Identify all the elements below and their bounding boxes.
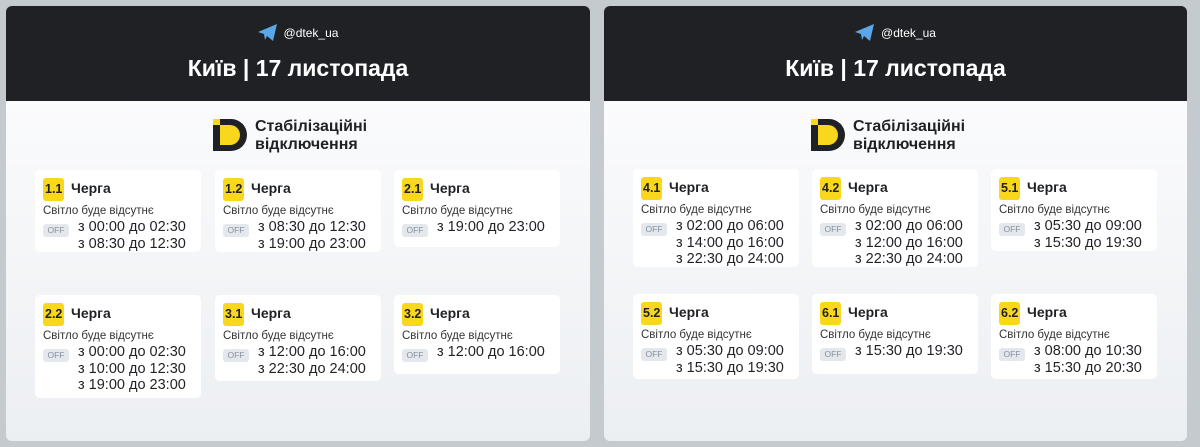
- card 6.2: Черга: [1027, 304, 1067, 320]
- telegram handle: @dtek_ua: [284, 26, 338, 40]
- card 6.1: Черга: [848, 304, 888, 320]
- card 3.1: з 12:00 до 16:00: [258, 344, 366, 360]
- card 2.2: з 00:00 до 02:30: [78, 344, 186, 360]
- telegram handle: @dtek_ua: [881, 26, 936, 40]
- logo: stabilization outages: відключення: [853, 136, 956, 153]
- card 2.1: OFF: [406, 225, 424, 235]
- card 2.2: Світло буде відсутнє: [43, 330, 154, 342]
- card 1.1: 1.1: [45, 182, 62, 196]
- card 6.1: з 15:30 до 19:30: [855, 343, 963, 359]
- card 3.2: Світло буде відсутнє: [402, 330, 513, 342]
- card 5.1: OFF: [1004, 224, 1020, 234]
- card 4.1: з 14:00 до 16:00: [676, 234, 784, 250]
- card 2.2: з 19:00 до 23:00: [78, 377, 186, 393]
- card 6.2: OFF: [1004, 349, 1020, 359]
- card 2.1: 2.1: [404, 182, 421, 196]
- card 5.2: 5.2: [643, 306, 660, 320]
- card 3.2: [394, 295, 560, 374]
- logo: stabilization outages: відключення: [255, 136, 358, 153]
- card 4.2: Черга: [848, 179, 888, 195]
- card 2.2: з 10:00 до 12:30: [78, 360, 186, 376]
- card 1.2: 1.2: [225, 182, 242, 196]
- card 3.2: з 12:00 до 16:00: [437, 344, 545, 360]
- card 1.1: з 00:00 до 02:30: [78, 219, 186, 235]
- card 4.2: [812, 169, 978, 267]
- card 3.1: [215, 295, 381, 381]
- card 4.2: OFF: [824, 224, 842, 234]
- card 5.2: з 05:30 до 09:00: [676, 343, 784, 359]
- card 4.2: Світло буде відсутнє: [820, 204, 931, 216]
- card 3.1: Світло буде відсутнє: [223, 330, 334, 342]
- card 5.1: з 15:30 до 19:30: [1034, 234, 1142, 250]
- card 6.2: 6.2: [1001, 306, 1018, 320]
- card 1.2: Черга: [251, 180, 291, 196]
- card 6.2: [991, 294, 1157, 379]
- card 3.2: Черга: [430, 305, 470, 321]
- card 5.1: 5.1: [1001, 181, 1018, 195]
- card 6.2: Світло буде відсутнє: [999, 329, 1110, 341]
- card 2.2: 2.2: [45, 307, 62, 321]
- card 3.1: OFF: [228, 350, 244, 360]
- card 5.1: [991, 169, 1157, 251]
- card 3.2: 3.2: [404, 307, 421, 321]
- card 3.2: OFF: [406, 350, 424, 360]
- card 4.2: з 12:00 до 16:00: [855, 234, 963, 250]
- card 1.1: з 08:30 до 12:30: [78, 236, 186, 252]
- card 1.2: з 08:30 до 12:30: [258, 219, 366, 235]
- card 4.1: Черга: [669, 179, 709, 195]
- card 1.1: [35, 170, 201, 252]
- telegram handle: [258, 24, 338, 41]
- card 6.1: 6.1: [822, 306, 839, 320]
- card 5.1: з 05:30 до 09:00: [1034, 218, 1142, 234]
- card 4.2: 4.2: [822, 181, 839, 195]
- telegram handle: [855, 24, 936, 41]
- panel: left schedule: [6, 6, 590, 441]
- card 2.2: OFF: [48, 350, 64, 360]
- card 1.2: з 19:00 до 23:00: [258, 236, 366, 252]
- card 4.2: з 02:00 до 06:00: [855, 218, 963, 234]
- card 2.2: Черга: [71, 305, 111, 321]
- card 5.1: Черга: [1027, 179, 1067, 195]
- header: [6, 6, 590, 101]
- card 4.1: OFF: [646, 224, 662, 234]
- card 6.2: з 15:30 до 20:30: [1034, 360, 1142, 376]
- card 1.1: OFF: [48, 225, 64, 235]
- card 1.2: [215, 170, 381, 252]
- title: Київ | 17 листопада: [785, 55, 1006, 81]
- card 6.1: OFF: [824, 349, 842, 359]
- card 5.1: Світло буде відсутнє: [999, 204, 1110, 216]
- logo: stabilization outages: Стабілізаційні: [853, 118, 965, 135]
- card 5.2: Черга: [669, 304, 709, 320]
- card 3.1: з 22:30 до 24:00: [258, 360, 366, 376]
- header: [604, 6, 1187, 101]
- card 1.2: Світло буде відсутнє: [223, 205, 334, 217]
- card 4.1: [633, 169, 799, 267]
- card 2.1: Світло буде відсутнє: [402, 205, 513, 217]
- panel: right schedule: [604, 6, 1187, 441]
- card 3.1: 3.1: [225, 307, 242, 321]
- card 4.2: з 22:30 до 24:00: [855, 251, 963, 267]
- card 3.1: Черга: [251, 305, 291, 321]
- card 1.1: Черга: [71, 180, 111, 196]
- logo: stabilization outages: [213, 118, 367, 153]
- card 6.1: [812, 294, 978, 374]
- title: Київ | 17 листопада: [188, 55, 408, 81]
- card 2.1: з 19:00 до 23:00: [437, 219, 545, 235]
- card 5.2: [633, 294, 799, 379]
- card 6.2: з 08:00 до 10:30: [1034, 343, 1142, 359]
- card 5.2: OFF: [646, 349, 662, 359]
- card 5.2: з 15:30 до 19:30: [676, 360, 784, 376]
- card 4.1: з 02:00 до 06:00: [676, 218, 784, 234]
- card 1.2: OFF: [228, 225, 244, 235]
- card 4.1: Світло буде відсутнє: [641, 204, 752, 216]
- logo: stabilization outages: Стабілізаційні: [255, 118, 367, 135]
- card 6.1: Світло буде відсутнє: [820, 329, 931, 341]
- card 2.1: [394, 170, 560, 247]
- card 1.1: Світло буде відсутнє: [43, 205, 154, 217]
- card 4.1: 4.1: [643, 181, 660, 195]
- card 2.1: Черга: [430, 180, 470, 196]
- card 2.2: [35, 295, 201, 398]
- card 5.2: Світло буде відсутнє: [641, 329, 752, 341]
- card 4.1: з 22:30 до 24:00: [676, 251, 784, 267]
- logo: stabilization outages: [811, 118, 965, 153]
